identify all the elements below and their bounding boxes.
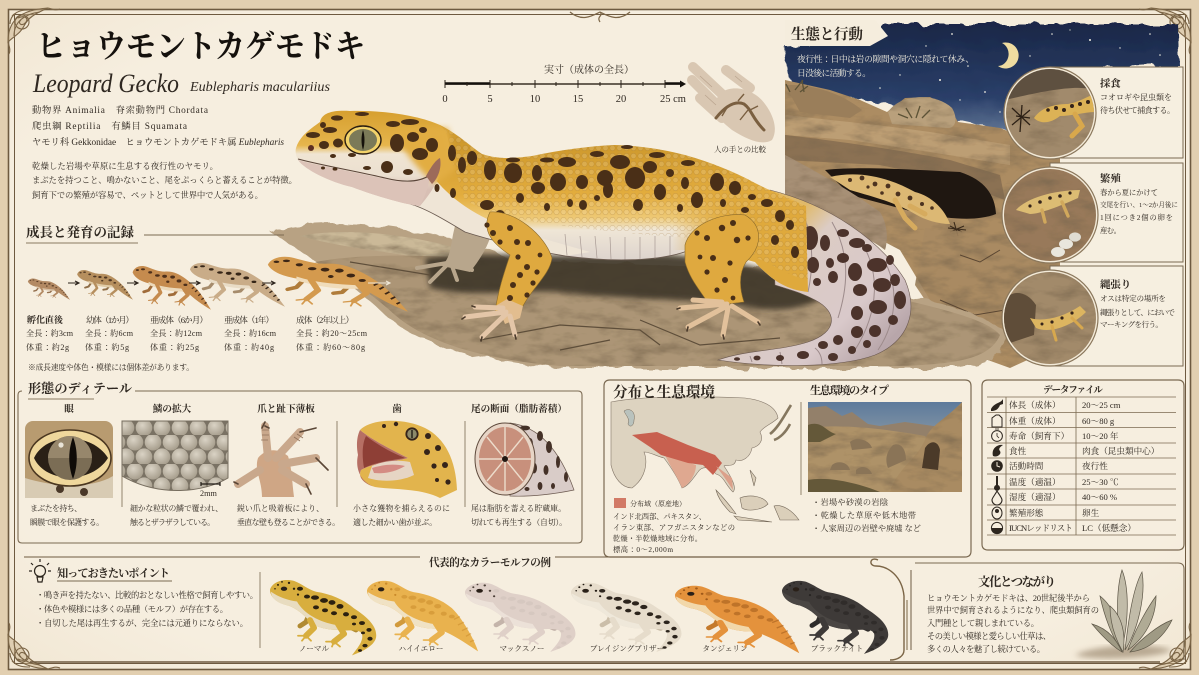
taxonomy text: 爬虫綱 Reptilia 有鱗目 Squamata (32, 120, 187, 132)
habitat bullets: ・人家周辺の岩壁や廃墟 など (812, 523, 921, 533)
table text: 体長（成体） (1009, 399, 1061, 410)
card: breeding: 産む。 (1100, 226, 1121, 235)
heading: color morphs: 代表的なカラーモルフの例 (429, 556, 551, 569)
growth stages labels: 亜成体（6か月） (150, 314, 208, 325)
size scale: 0 (442, 94, 448, 105)
taxonomy text (32, 104, 284, 148)
table text: 肉食（昆虫類中心） (1082, 445, 1159, 456)
table icons (991, 399, 1003, 534)
table text: 20～25 cm (1082, 400, 1121, 410)
distribution text: 標高：0～2,000m (613, 545, 673, 554)
cave (825, 168, 996, 219)
table text: 温度（適温） (1009, 476, 1061, 487)
card: breeding: 繁殖 (1100, 172, 1121, 185)
color morphs: ノーマル (299, 644, 329, 653)
growth stages labels: 全長：約6cm (85, 328, 134, 338)
captions: 適した細かい歯が並ぶ。 (353, 517, 437, 527)
table text: 食性 (1009, 445, 1027, 456)
card: feeding: 採食 (1100, 77, 1121, 90)
color morphs: ハイイエロー (399, 644, 443, 653)
heading: morphology: 形態のディテール (28, 380, 133, 396)
size scale: 20 (616, 94, 626, 105)
map legend: 分布域（原産地） (630, 499, 686, 508)
heading: habitat types: 生息環境のタイプ (810, 383, 889, 397)
icon: toe pad foot (234, 422, 328, 497)
table text: 活動時間 (1009, 460, 1044, 471)
captions: 小さな獲物を捕らえるのに (353, 503, 450, 513)
captions: 細かな粒状の鱗で覆われ、 (130, 503, 223, 513)
distribution text: イラン東部、アフガニスタンなどの (613, 523, 735, 532)
card: territory: 縄張りとして、においで (1100, 307, 1175, 317)
heading: things to know: 知っておきたいポイント (57, 566, 170, 580)
hind leg (677, 215, 760, 339)
table lines (987, 397, 1176, 535)
stars (879, 29, 1161, 113)
heading: distribution: 分布と生息環境 (613, 383, 715, 401)
tips list (36, 590, 258, 628)
body spots (306, 112, 799, 258)
culture text: その美しい模様と愛らしい仕草は、 (927, 631, 1051, 641)
color morphs: タンジェリン (702, 644, 748, 653)
far front leg (417, 226, 490, 282)
night activity text: 夜行性：日中は岩の隙間や洞穴に隠れて休み、 (797, 53, 974, 64)
growth stages labels: 体重：約5g (85, 342, 129, 352)
culture text: 世界中で飼育されるようになり、爬虫類飼育の (927, 605, 1099, 615)
culture heading: 文化とつながり (978, 574, 1056, 589)
tips list: ・鳴き声を持たない、比較的おとなしい性格で飼育しやすい。 (36, 590, 258, 600)
near front leg (462, 212, 552, 341)
night sky (785, 24, 1180, 138)
panel: ecology scene (785, 24, 1180, 368)
card: feeding: 待ち伏せて捕食する。 (1100, 105, 1175, 115)
table text (1009, 399, 1159, 533)
ground under main gecko (270, 224, 1006, 368)
description text: 飼育下での繁殖が容易で、ペットとして世界中で人気がある。 (32, 190, 263, 200)
taxonomy text: 動物界 Animalia 脊索動物門 Chordata (32, 104, 208, 116)
captions: 切れても再生する（自切）。 (471, 517, 567, 527)
eye (345, 126, 381, 154)
panel: data file (982, 380, 1184, 550)
icon: scales (122, 421, 228, 498)
table text: 60～80 g (1082, 416, 1115, 426)
table text: 寿命（飼育下） (1009, 430, 1069, 441)
culture text: 多くの人々を魅了し続けている。 (927, 644, 1045, 654)
main gecko illustration (296, 111, 911, 365)
growth stages labels: 孵化直後 (27, 314, 64, 325)
english name: Leopard Gecko (32, 69, 179, 98)
table text: 10～20 年 (1082, 430, 1119, 441)
distribution text: 乾燥・半乾燥地域に分布。 (613, 534, 702, 543)
habitat photo (808, 402, 962, 492)
panel: distribution and habitat (604, 380, 971, 557)
card: breeding: 1回につき2個の卵を (1100, 213, 1173, 222)
captions: まぶたを持ち、 (30, 503, 82, 513)
color morphs: マックスノー (500, 644, 544, 653)
cricket (948, 222, 966, 236)
moon (998, 42, 1019, 68)
gecko in cave (830, 174, 950, 228)
panel: culture (911, 563, 1184, 660)
table text: IUCNレッドリスト (1009, 523, 1073, 533)
body (400, 125, 808, 292)
icon: tail cross-section (475, 423, 574, 496)
table text: LC（低懸念） (1082, 522, 1136, 533)
card: breeding: 春から夏にかけて (1100, 188, 1158, 197)
growth stages labels: 成体（2年以上） (296, 314, 354, 325)
growth stages labels: 体重：約60～80g (296, 342, 365, 352)
sub-headings: 尾の断面（脂肪蓄積） (471, 403, 567, 415)
table text: 湿度（適湿） (1009, 491, 1061, 502)
captions: 触るとザラザラしている。 (130, 517, 215, 527)
captions (30, 503, 567, 527)
size scale: 10 (530, 94, 540, 105)
distribution text: インド北西部、パキスタン、 (613, 512, 706, 521)
growth stages labels: 幼体（1か月） (86, 314, 134, 325)
night activity text (797, 53, 974, 78)
habitat bullets (812, 497, 921, 533)
culture text (927, 593, 1099, 654)
table text: 体重（成体） (1009, 415, 1061, 426)
heading: ecology: 生態と行動 (791, 25, 863, 43)
map (611, 397, 799, 522)
icon: eye (25, 421, 113, 498)
heading: growth: 成長と発育の記録 (26, 224, 134, 240)
captions: 鋭い爪と吸着板により、 (237, 503, 324, 513)
table text: 卵生 (1082, 507, 1100, 518)
growth stages labels: 全長：約3cm (26, 328, 74, 338)
sub-headings (64, 403, 567, 415)
captions: 尾は脂肪を蓄える貯蔵庫。 (471, 503, 566, 513)
panel: bottom band (24, 557, 1160, 662)
table text: 25～30 ℃ (1082, 477, 1119, 487)
habitat bullets: ・乾燥した草原や低木地帯 (812, 510, 916, 520)
scientific name: Eublepharis maculariius (189, 80, 331, 95)
tail (718, 190, 911, 365)
hand caption: 人の手との比較 (714, 144, 766, 154)
card: territory (1002, 266, 1183, 366)
color morphs (270, 580, 888, 655)
taxonomy text: ヤモリ科 Gekkonidae ヒョウモントカゲモドキ属 Eublepharis (32, 136, 284, 148)
growth stages labels: 体重：約2g (26, 342, 69, 352)
sub-headings: 眼 (64, 404, 74, 415)
card: feeding (1004, 67, 1183, 159)
map legend (614, 498, 686, 508)
captions: 垂直な壁も登ることができる。 (237, 517, 340, 527)
description text: まぶたを持つこと、鳴かないこと、尾をぷっくらと蓄えることが特徴。 (32, 175, 297, 185)
habitat bullets: ・岩場や砂漠の岩陰 (812, 497, 889, 507)
growth stages labels (26, 314, 368, 352)
color morphs: ブラックナイト (811, 644, 863, 653)
data file heading: データファイル (1043, 385, 1103, 396)
description text (32, 161, 297, 200)
growth stages labels: 全長：約12cm (150, 328, 203, 338)
growth stages labels: 亜成体（1年） (224, 314, 274, 325)
sub-headings: 鱗の拡大 (153, 403, 192, 415)
growth stages labels: 体重：約40g (224, 342, 274, 352)
growth note: ※成長速度や体色・模様には個体差があります。 (28, 362, 194, 372)
culture text: 入門種として親しまれている。 (927, 618, 1039, 628)
tips list: ・自切した尾は再生するが、完全には元通りにならない。 (36, 618, 248, 628)
card: feeding: コオロギや昆虫類を (1100, 92, 1172, 102)
growth arrows (68, 281, 390, 285)
table text: 40～60 % (1082, 492, 1117, 502)
card: territory: オスは特定の場所を (1100, 293, 1166, 303)
captions: 瞬膜で眼を保護する。 (30, 517, 104, 527)
card: territory: マーキングを行う。 (1100, 319, 1163, 329)
rocky landscape (785, 80, 1060, 368)
color morphs: ブレイジングブリザー (590, 644, 664, 653)
size scale: 15 (573, 94, 583, 105)
card: breeding: 交尾を行い、1～2か月後に (1100, 200, 1178, 209)
distribution text (613, 512, 735, 554)
sub-headings: 歯 (392, 403, 402, 415)
card: territory: 縄張り (1100, 278, 1131, 291)
panel: morphology details (18, 380, 582, 543)
icon: agave plant (1075, 570, 1172, 659)
shrubs (786, 80, 930, 118)
table text: 繁殖形態 (1009, 507, 1044, 518)
card: breeding (1002, 163, 1183, 263)
growth stages labels: 全長：約16cm (224, 328, 277, 338)
culture text: ヒョウモントカゲモドキは、20世紀後半から (927, 593, 1090, 603)
icon: light bulb (29, 559, 51, 582)
description text: 乾燥した岩場や草原に生息する夜行性のヤモリ。 (32, 161, 218, 171)
size scale: 25 cm (660, 94, 686, 105)
tips list: ・体色や模様には多くの品種（モルフ）が存在する。 (36, 604, 228, 614)
size scale: 実寸（成体の全長） (544, 63, 634, 76)
icon: hand comparison (692, 67, 775, 142)
size scale: 5 (487, 94, 493, 105)
growth stages illustrations (28, 257, 408, 312)
growth stages labels: 体重：約25g (150, 342, 199, 352)
growth stages labels: 全長：約20～25cm (296, 328, 368, 338)
icon: scales: 2mm (200, 489, 217, 498)
sub-headings: 爪と趾下薄板 (257, 403, 315, 415)
title: ヒョウモントカゲモドキ (36, 28, 365, 64)
head (296, 111, 456, 206)
size scale (442, 63, 686, 105)
table text: 夜行性 (1082, 460, 1108, 471)
heading: ecology (785, 20, 888, 46)
icon: open mouth (357, 421, 457, 498)
night activity text: 日没後に活動する。 (797, 67, 871, 78)
